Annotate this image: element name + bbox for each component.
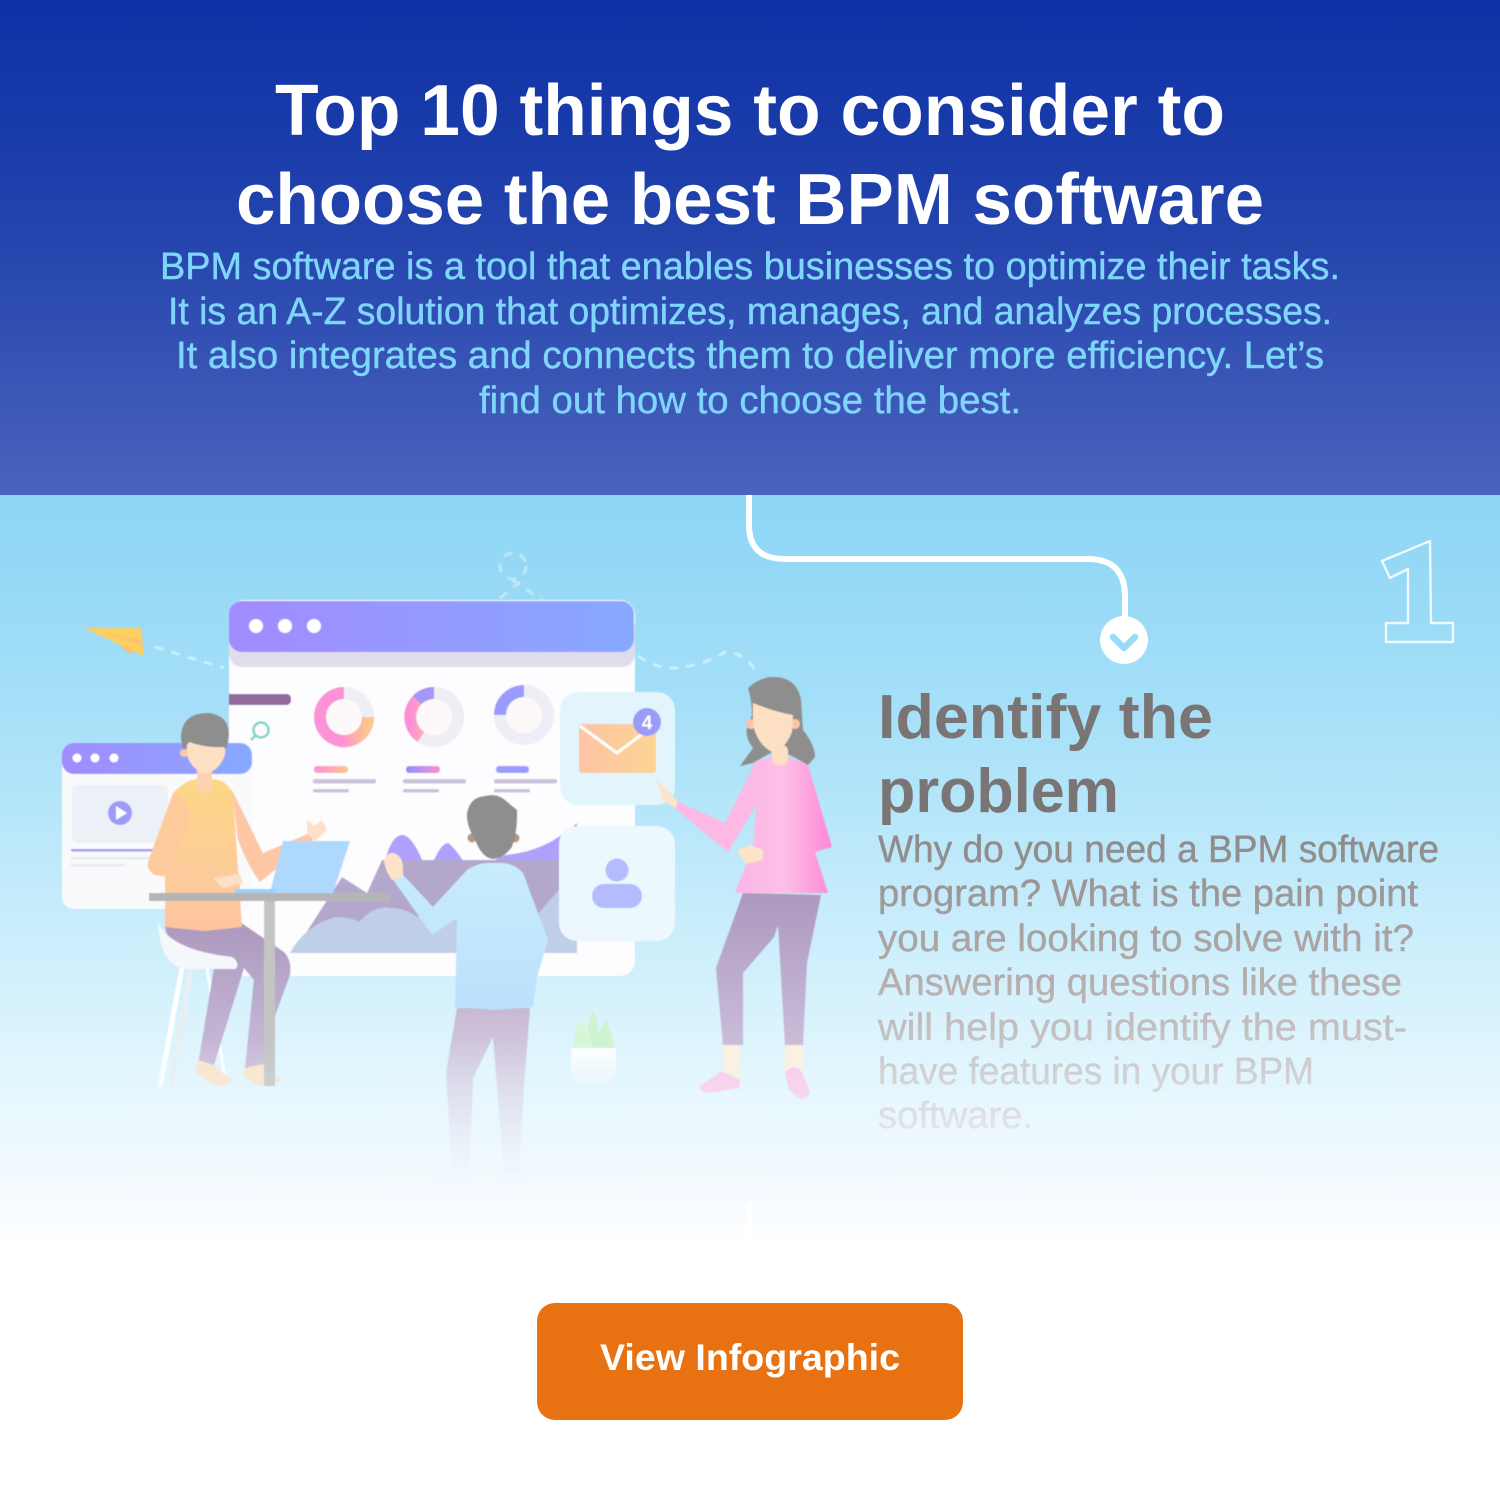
laptop (235, 841, 350, 893)
icon: paper plane (84, 628, 144, 656)
legs skin (723, 1043, 740, 1077)
illustration: team at dashboard (62, 553, 832, 1184)
step body text: have features in your BPM (878, 1051, 1314, 1093)
area chart (290, 823, 577, 953)
stool seat (158, 922, 237, 969)
panel: header band (0, 0, 1500, 495)
step body text: program? What is the pain point (878, 873, 1418, 915)
shoes (700, 1071, 740, 1093)
hand (384, 853, 403, 880)
near arm (148, 793, 240, 888)
hands (656, 779, 678, 808)
head (467, 795, 520, 859)
trousers (716, 893, 821, 1045)
button: view infographic (537, 1303, 963, 1420)
icon: chevron circle (1100, 616, 1148, 664)
connector arrow from header to step (749, 495, 1148, 664)
hands (307, 819, 327, 841)
small video window (62, 743, 252, 909)
person: standing woman (656, 677, 832, 1099)
card: user profile (559, 826, 675, 941)
icon: play button (108, 801, 132, 825)
step heading: problem (878, 757, 1119, 826)
icon: magnifier (251, 722, 268, 740)
step heading (878, 683, 1213, 826)
button: view infographic: View Infographic (600, 1337, 900, 1378)
window title bar (229, 601, 635, 667)
step number 1 outline (1382, 541, 1453, 642)
step body text: Why do you need a BPM software (878, 829, 1439, 871)
faded connector below step (746, 1203, 752, 1245)
intro paragraph: It is an A-Z solution that optimizes, manages, and analyzes processes. (168, 291, 1332, 333)
donut chart 2 (410, 693, 458, 741)
trousers (446, 1008, 530, 1173)
intro paragraph (160, 246, 1340, 422)
plant (571, 1010, 616, 1085)
hair (740, 677, 815, 766)
shoes (196, 1060, 232, 1085)
icon: badge 4: 4 (642, 713, 653, 734)
top (735, 757, 832, 893)
title: choose the best BPM software (236, 160, 1264, 240)
dashed flight paths (155, 553, 756, 672)
step body text: you are looking to solve with it? (878, 918, 1414, 960)
trousers (165, 922, 290, 1068)
arm (675, 767, 758, 852)
donut chart 3 (500, 691, 548, 739)
intro paragraph: BPM software is a tool that enables businesses to optimize their tasks. (160, 246, 1340, 288)
intro paragraph: find out how to choose the best. (479, 380, 1021, 422)
panel: step section sky gradient (0, 495, 1500, 1245)
person: seated man (148, 713, 327, 1087)
main dashboard window (229, 600, 635, 976)
title (236, 71, 1264, 240)
step body text (877, 829, 1439, 1137)
person: standing man (384, 794, 548, 1141)
title: Top 10 things to consider to (275, 71, 1225, 151)
step heading: Identify the (878, 683, 1213, 752)
card: mail notification (560, 692, 675, 805)
head (180, 713, 229, 793)
step body text: will help you identify the must- (877, 1007, 1407, 1049)
step body text: Answering questions like these (878, 962, 1402, 1004)
head (746, 703, 800, 765)
intro paragraph: It also integrates and connects them to deliver more efficiency. Let’s (176, 335, 1324, 377)
chart legends (313, 766, 557, 792)
shoes (434, 1172, 470, 1184)
far arm (232, 790, 313, 882)
step body text: software. (878, 1095, 1033, 1137)
stool legs (160, 968, 225, 1087)
sidebar bar (229, 694, 291, 705)
shirt (392, 863, 548, 1010)
table (149, 893, 390, 1086)
donut chart 1 (320, 693, 368, 741)
torso (165, 779, 242, 931)
